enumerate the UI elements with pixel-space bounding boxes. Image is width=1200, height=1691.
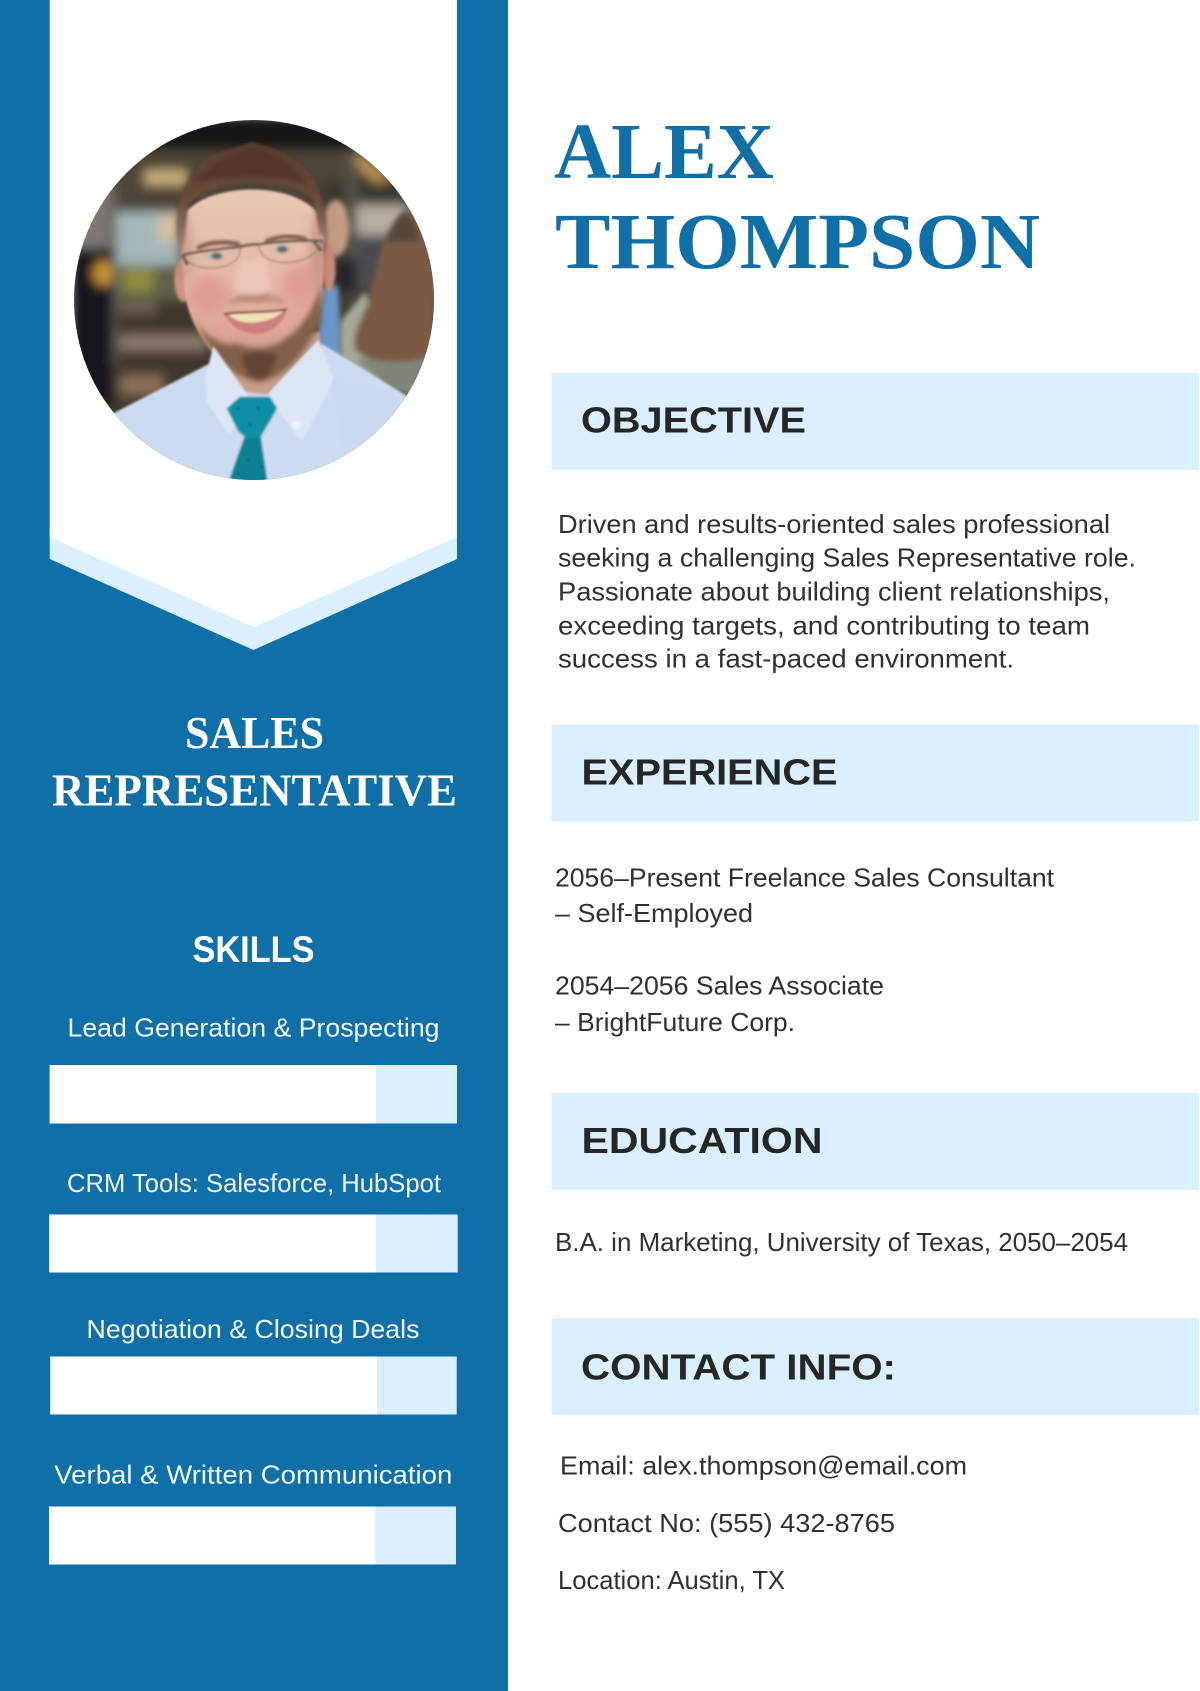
skill: negotiation: Negotiation & Closing Deals (86, 1314, 420, 1344)
job title (52, 707, 457, 816)
skill: lead generation (50, 1012, 457, 1124)
woman at right (340, 212, 437, 395)
job title: SALES (185, 707, 324, 758)
panel: experience: EXPERIENCE (582, 752, 838, 792)
objective text: Passionate about building client relationships, (558, 577, 1110, 607)
man in foreground (113, 140, 407, 480)
panel: education: EDUCATION (582, 1120, 822, 1161)
skill: CRM tools (49, 1168, 458, 1272)
panel: blue sidebar (0, 0, 508, 1691)
panel: objective (552, 373, 1199, 674)
education entry: B.A. in Marketing, University of Texas, 2050–2054 (555, 1227, 1128, 1257)
experience entries: – BrightFuture Corp. (555, 1007, 795, 1037)
experience entries: 2054–2056 Sales Associate (555, 970, 884, 1000)
contact details: Email: alex.thompson@email.com (560, 1450, 967, 1480)
objective text: exceeding targets, and contributing to team (558, 610, 1090, 640)
face (180, 188, 325, 352)
skill: lead generation: Lead Generation & Prospecting (68, 1012, 440, 1042)
cheeks (179, 208, 328, 312)
hair (176, 142, 328, 258)
title: candidate name: THOMPSON (555, 199, 1040, 286)
skill: CRM tools: CRM Tools: Salesforce, HubSpot (67, 1168, 442, 1198)
contact details (558, 1450, 967, 1595)
experience entries (555, 862, 1055, 1037)
profile photo (70, 115, 440, 485)
beard (196, 280, 323, 381)
ears (174, 245, 336, 302)
skill: negotiation (50, 1314, 457, 1414)
eyes (202, 246, 294, 261)
objective text: success in a fast-paced environment. (558, 644, 1014, 674)
banner with chevron (50, 0, 457, 650)
smile (224, 309, 287, 334)
experience entries: 2056–Present Freelance Sales Consultant (555, 862, 1055, 892)
contact details: Contact No: (555) 432-8765 (558, 1508, 895, 1538)
objective text: seeking a challenging Sales Representative role. (558, 543, 1136, 573)
person behind (318, 200, 349, 363)
nose (235, 258, 272, 300)
tie (227, 397, 277, 485)
job title: REPRESENTATIVE (52, 764, 457, 816)
eyebrows (198, 236, 305, 248)
title: candidate name: ALEX (554, 109, 774, 196)
panel: education (552, 1093, 1199, 1257)
glasses (183, 241, 323, 268)
objective text (558, 509, 1136, 674)
panel: contact info (552, 1318, 1199, 1595)
panel: experience (552, 724, 1199, 1037)
title: candidate name (554, 109, 1040, 286)
panel: objective: OBJECTIVE (581, 400, 806, 440)
photo background (70, 115, 440, 485)
skills heading: SKILLS (192, 929, 314, 970)
neck (229, 330, 322, 396)
contact details: Location: Austin, TX (558, 1565, 785, 1595)
skill: communication (49, 1460, 456, 1564)
panel: contact info: CONTACT INFO: (581, 1346, 896, 1388)
objective text: Driven and results-oriented sales professional (558, 509, 1110, 539)
shirt (113, 342, 407, 480)
collar (205, 340, 333, 441)
experience entries: – Self-Employed (555, 898, 753, 928)
skill: communication: Verbal & Written Communication (54, 1460, 452, 1490)
